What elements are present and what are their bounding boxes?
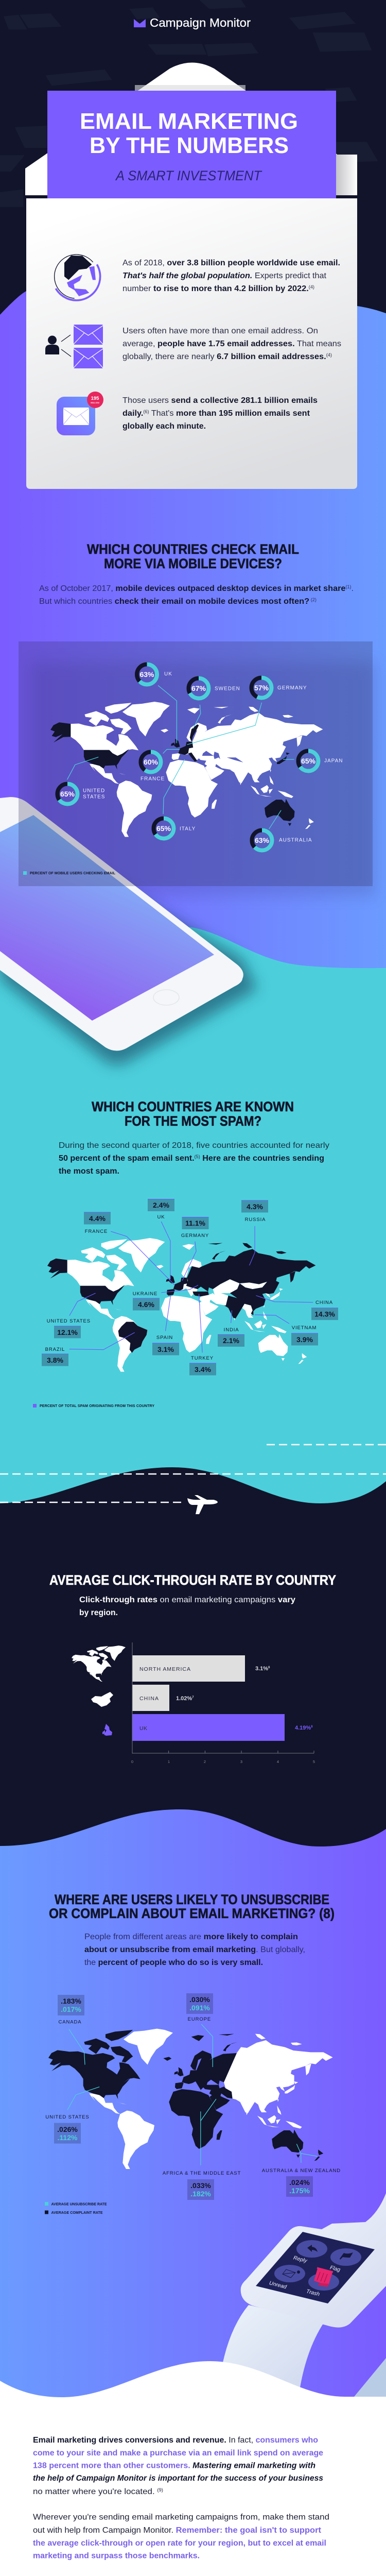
callout: Brazil 3.8%: 3.8% — [47, 1356, 64, 1364]
donut: Japan 65%: 65% — [301, 757, 316, 765]
donut: Sweden 67%: SWEDEN — [215, 686, 240, 691]
callout: India 2.1%: 2.1% — [223, 1336, 240, 1345]
donut: France 60%: 60% — [144, 758, 159, 766]
callout: United States: .112% — [58, 2133, 78, 2142]
heading: mobile devices — [87, 541, 299, 571]
smart watch illustration — [221, 2193, 386, 2391]
text: closing paragraph one: no matter where you're located. — [33, 2487, 148, 2496]
callout: Africa and the Middle East: .033% — [190, 2181, 211, 2190]
trash button: Trash — [305, 2289, 321, 2297]
bar: China: 7 — [192, 1696, 194, 1699]
text: closing paragraph two: out with help from Campaign Monitor. Remember: the goal isn't to support — [33, 2526, 322, 2535]
heading: click-through: AVERAGE CLICK-THROUGH RATE BY COUNTRY — [49, 1572, 336, 1588]
callout: India 2.1%: INDIA — [224, 1327, 239, 1333]
donut: France 60%: FRANCE — [141, 776, 165, 782]
donut: United States 65% — [58, 784, 105, 804]
callout: United States — [45, 2114, 90, 2144]
white closing section background — [0, 2361, 386, 2576]
logo: Campaign Monitor header: Campaign Monitor — [150, 16, 251, 29]
text: closing paragraph two: marketing and surpass those benchmarks. — [33, 2551, 200, 2561]
callout: Ukraine 4.6% — [133, 1291, 160, 1311]
text: emails sent: more than 195 million emails sent — [176, 409, 310, 418]
heading: spam: WHICH COUNTRIES ARE KNOWN — [92, 1099, 294, 1114]
icon: mail app with badge: 195 — [91, 396, 99, 401]
title banner: EMAIL MARKETING — [80, 109, 298, 134]
callout: Australia and New Zealand — [262, 2168, 341, 2197]
title banner: BY THE NUMBERS — [90, 133, 289, 158]
text: emails sent: globally each minute. — [122, 422, 206, 431]
heading: unsubscribe: WHERE ARE USERS LIKELY TO UNSUBSCRIBE — [55, 1892, 329, 1907]
text: email users — [122, 259, 340, 293]
bar: North America — [132, 1655, 270, 1682]
text: unsubscribe intro: the percent of people who do so is very small. — [84, 1958, 263, 1967]
callout: Germany 11.1% — [181, 1217, 209, 1239]
callout: United States 12.1% — [47, 1318, 91, 1338]
bar chart: click-through rate — [131, 1642, 315, 1764]
title banner — [47, 91, 336, 198]
bar: China: CHINA — [139, 1696, 159, 1702]
callout: United States 12.1%: 12.1% — [57, 1328, 78, 1336]
watch body — [241, 2193, 386, 2328]
callout: Ukraine 4.6%: 4.6% — [138, 1300, 155, 1309]
strap — [221, 2305, 324, 2391]
callout: Vietnam 3.9%: VIETNAM — [292, 1325, 317, 1331]
callout: Canada: .017% — [61, 2005, 81, 2013]
callout: UK 2.4%: UK — [157, 1214, 165, 1220]
icon: mail app with badge: MILLION — [91, 401, 99, 404]
callout: Turkey 3.4%: TURKEY — [191, 1355, 214, 1361]
callout: France 4.4%: 4.4% — [89, 1214, 106, 1223]
flight paths: dashed lines — [0, 1445, 386, 1502]
donut: United States 65%: 65% — [60, 790, 75, 798]
callout: Spain 3.1%: 3.1% — [157, 1345, 174, 1353]
callout: UK 2.4% — [148, 1199, 174, 1220]
heading: mobile devices: MORE VIA MOBILE DEVICES? — [104, 556, 282, 571]
heading: mobile devices: WHICH COUNTRIES CHECK EMAIL — [87, 541, 299, 557]
icon: person with two envelopes — [45, 325, 103, 368]
donut: France 60% — [141, 752, 165, 782]
callout: Vietnam 3.9%: 3.9% — [296, 1335, 313, 1344]
legend: unsubscribe and complaint — [45, 2202, 107, 2215]
text: mobile intro — [39, 584, 354, 606]
world map: spam — [47, 1238, 315, 1371]
axis: 4 — [277, 1759, 279, 1764]
bar: UK — [132, 1714, 313, 1741]
purple gradient section background — [0, 278, 386, 1030]
text: click-through intro: Click-through rates on email marketing campaigns vary — [79, 1596, 295, 1604]
text: spam intro — [59, 1141, 329, 1176]
connector lines: unsubscribe — [67, 2024, 318, 2165]
text: spam intro: During the second quarter of 2018, five countries accounted for nearly — [59, 1141, 329, 1150]
donut: Australia 63% — [252, 831, 312, 850]
donut: UK 63%: UK — [164, 671, 172, 677]
callout: Turkey 3.4%: 3.4% — [195, 1365, 212, 1374]
reply button: Reply — [292, 2255, 308, 2264]
bar: UK: 4.19% — [295, 1725, 311, 1731]
callout: Spain 3.1% — [152, 1335, 179, 1355]
callout: United States: .026% — [57, 2125, 78, 2133]
bar: North America: NORTH AMERICA — [139, 1666, 190, 1672]
header background wireframe pattern — [0, 0, 378, 207]
donut: Japan 65%: JAPAN — [324, 758, 343, 764]
text: closing paragraph one: 138 percent more than other customers. Mastering email marketing with — [33, 2462, 315, 2470]
callout: Canada: .183% — [61, 1997, 81, 2005]
callout: Europe: .030% — [189, 1995, 210, 2004]
callout: Africa and the Middle East: AFRICA & THE MIDDLE EAST — [163, 2171, 241, 2176]
world map: mobile email — [50, 702, 323, 837]
text: mobile intro: . — [351, 584, 354, 593]
donut: Australia 63%: AUSTRALIA — [279, 838, 312, 843]
icon: airplane — [187, 1495, 218, 1514]
mini map: North America — [72, 1646, 126, 1682]
text: closing paragraph one: come to your site and make a purchase via an email link spend on average — [33, 2449, 323, 2458]
donut: UK 63%: 63% — [139, 670, 154, 679]
axis — [131, 1642, 315, 1764]
unread button — [268, 2265, 305, 2290]
heading: spam — [92, 1099, 294, 1129]
donut: Germany 57%: 57% — [254, 684, 269, 692]
text: emails sent: Those users send a collective 281.1 billion emails — [122, 396, 318, 405]
reply button — [292, 2240, 327, 2264]
text: closing paragraph one: (9) — [157, 2487, 163, 2493]
flag button — [329, 2248, 361, 2273]
text: emails sent: (6) — [143, 409, 149, 414]
heading: unsubscribe — [49, 1892, 335, 1921]
text: closing paragraph one: the help of Campaign Monitor is important for the success of your business — [33, 2474, 323, 2483]
callout: Australia and New Zealand: AUSTRALIA & NEW ZEALAND — [262, 2168, 341, 2174]
text: closing paragraph two: the average click-through or open rate for your region, but to excel at email — [33, 2539, 326, 2548]
callout: Russia 4.3% — [241, 1200, 268, 1223]
text: email addresses: (4) — [326, 352, 332, 358]
donut: Sweden 67% — [188, 678, 240, 699]
trash button — [305, 2268, 339, 2297]
text: click-through intro: by region. — [79, 1608, 118, 1617]
callout: China 14.3% — [311, 1300, 338, 1320]
legend: unsubscribe and complaint: AVERAGE COMPLAINT RATE — [51, 2211, 103, 2215]
callout: Europe — [186, 1993, 213, 2022]
bar: UK: 8 — [311, 1725, 313, 1728]
callout: Brazil 3.8%: BRAZIL — [45, 1347, 65, 1352]
callout: Africa and the Middle East: .182% — [190, 2190, 211, 2198]
callout: France 4.4% — [84, 1212, 111, 1234]
donut: Australia 63%: 63% — [255, 836, 270, 844]
callout: Russia 4.3%: 4.3% — [247, 1202, 264, 1211]
phone illustration — [0, 797, 257, 1065]
map panel: mobile email — [19, 641, 373, 886]
donut: Sweden 67%: 67% — [191, 684, 206, 692]
callout: Turkey 3.4% — [189, 1355, 216, 1376]
callout: Canada: CANADA — [59, 2020, 81, 2025]
connector lines: spam — [69, 1222, 313, 1352]
text: mobile intro: But which countries check their email on mobile devices most often? — [39, 597, 305, 606]
callout: Vietnam 3.9% — [291, 1325, 318, 1346]
mini map: China — [91, 1692, 113, 1707]
text: emails sent: That's — [149, 409, 176, 418]
text: email users: That's half the global population. Experts predict that — [122, 272, 327, 280]
bar: China: 1.02% — [176, 1696, 192, 1702]
text: mobile intro: (2) — [309, 597, 317, 602]
donut: Italy 65%: ITALY — [180, 826, 196, 832]
title banner: A SMART INVESTMENT — [115, 168, 262, 183]
donut: United States 65%: UNITED — [83, 788, 105, 793]
callout: Canada — [58, 1995, 84, 2025]
connector lines: mobile email — [67, 685, 294, 829]
donut: United States 65%: STATES — [83, 794, 105, 800]
text: email users: (4) — [309, 284, 314, 290]
callout: UK 2.4%: 2.4% — [153, 1201, 170, 1209]
callout: France 4.4%: FRANCE — [85, 1229, 108, 1234]
map panel shadow — [31, 662, 376, 896]
purple gradient section after click-through — [0, 1809, 386, 2411]
text: emails sent: daily. — [122, 409, 143, 418]
letter card — [26, 198, 357, 489]
callout: Brazil 3.8% — [42, 1347, 68, 1366]
callout: Germany 11.1%: 11.1% — [185, 1219, 206, 1227]
axis: 1 — [168, 1759, 170, 1764]
text: email addresses: average, people have 1.75 email addresses. That means — [122, 340, 341, 348]
text: email addresses: Users often have more than one email address. On — [122, 327, 318, 335]
bar: North America: 3.1% — [255, 1666, 268, 1672]
envelope flap — [25, 63, 357, 195]
text: click-through intro — [79, 1596, 295, 1617]
legend: mobile users: PERCENT OF MOBILE USERS CHECKING EMAIL — [30, 872, 116, 875]
callout: Africa and the Middle East — [163, 2171, 241, 2200]
icon: globe — [52, 252, 100, 300]
callout: India 2.1% — [218, 1327, 244, 1347]
legend: unsubscribe and complaint: AVERAGE UNSUBSCRIBE RATE — [51, 2203, 107, 2206]
heading: spam: FOR THE MOST SPAM? — [125, 1113, 261, 1129]
text: closing paragraph one: Email marketing drives conversions and revenue. In fact, consumers who — [33, 2436, 318, 2445]
callout: Germany 11.1%: GERMANY — [181, 1233, 209, 1239]
heading: unsubscribe: OR COMPLAIN ABOUT EMAIL MARKETING? (8) — [49, 1906, 335, 1921]
donut: Italy 65% — [153, 818, 196, 839]
axis: 3 — [240, 1759, 242, 1764]
text: closing paragraph two: Wherever you're sending email marketing campaigns from, make them stand — [33, 2513, 329, 2521]
world map: unsubscribe — [48, 2029, 333, 2169]
callout: Europe: EUROPE — [188, 2016, 211, 2022]
text: closing paragraph one — [33, 2436, 323, 2496]
text: mobile intro: As of October 2017, mobile devices outpaced desktop devices in market share — [39, 584, 343, 593]
bar: China — [132, 1685, 194, 1711]
callout: United States 12.1%: UNITED STATES — [47, 1318, 91, 1324]
donut: UK 63% — [137, 665, 172, 684]
axis: 0 — [131, 1759, 133, 1764]
text: email users: As of 2018, over 3.8 billion people worldwide use email. — [122, 259, 340, 267]
text: spam intro: 50 percent of the spam email sent. — [59, 1154, 195, 1163]
teal section background with waves — [0, 926, 386, 1503]
callout: Spain 3.1%: SPAIN — [156, 1335, 173, 1341]
text: email addresses: globally, there are nearly 6.7 billion email addresses. — [122, 352, 323, 361]
bar: North America: 6 — [268, 1666, 270, 1669]
text: unsubscribe intro: People from different areas are more likely to complain — [84, 1933, 298, 1941]
callout: China 14.3%: 14.3% — [314, 1310, 335, 1318]
donut: Japan 65% — [299, 751, 343, 771]
callout: Australia and New Zealand: .175% — [289, 2187, 310, 2195]
text: emails sent — [122, 396, 318, 431]
text: email addresses — [122, 327, 341, 361]
text: unsubscribe intro — [84, 1933, 305, 1967]
callout: United States: UNITED STATES — [45, 2114, 90, 2120]
text: unsubscribe intro: about or unsubscribe from email marketing. But globally, — [84, 1945, 305, 1954]
mini map: UK — [102, 1724, 112, 1736]
unread button: Unread — [268, 2280, 288, 2290]
text: spam intro: the most spam. — [59, 1167, 119, 1176]
text: closing paragraph two — [33, 2513, 329, 2561]
watch strap far end — [354, 2358, 386, 2401]
callout: Ukraine 4.6%: UKRAINE — [133, 1291, 157, 1297]
axis: 5 — [313, 1759, 315, 1764]
flag button: Flag — [329, 2265, 342, 2273]
text: email users: number to rise to more than 4.2 billion by 2022. — [122, 284, 305, 293]
legend: spam: PERCENT OF TOTAL SPAM ORIGINATING FROM THIS COUNTRY — [40, 1404, 154, 1408]
axis: 2 — [204, 1759, 206, 1764]
watch screen — [256, 2232, 375, 2303]
callout: China 14.3%: CHINA — [315, 1300, 333, 1306]
callout: Russia 4.3%: RUSSIA — [245, 1217, 266, 1223]
donut: Germany 57%: GERMANY — [277, 685, 307, 691]
text: spam intro: Here are the countries sending — [200, 1154, 324, 1163]
bar: UK: UK — [139, 1725, 147, 1732]
text: spam intro: (5) — [195, 1154, 200, 1159]
callout: Europe: .091% — [189, 2004, 210, 2012]
donut: Italy 65%: 65% — [156, 824, 171, 833]
text: mobile intro: (1) — [345, 584, 351, 589]
icon: mail app with badge — [57, 392, 103, 435]
callout: Australia and New Zealand: .024% — [289, 2178, 310, 2187]
donut: Germany 57% — [251, 678, 307, 698]
